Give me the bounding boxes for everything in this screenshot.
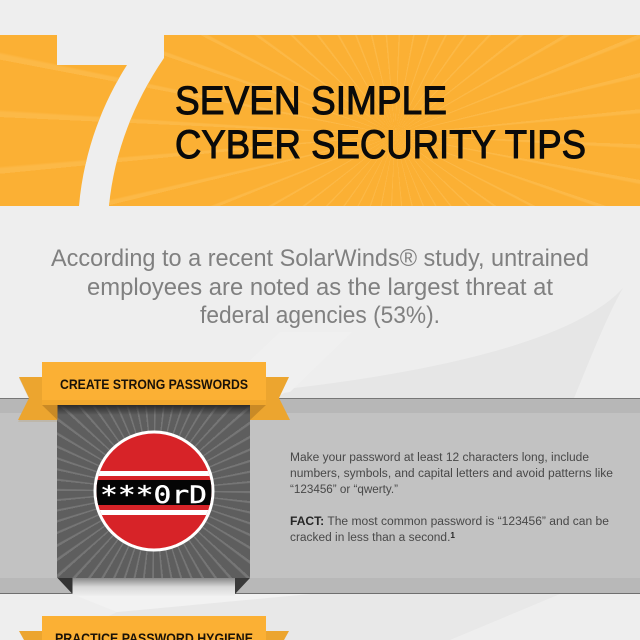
sunburst rays [0, 35, 640, 206]
ribbon: create strong passwords: CREATE STRONG PASSWORDS [60, 376, 248, 392]
tip body text: cracked in less than a second. [290, 532, 445, 544]
tip body text [290, 452, 613, 544]
header banner with cut-out numeral seven [0, 35, 640, 206]
intro text: According to a recent SolarWinds® study, untrained [51, 245, 589, 272]
tip body text: 1 [450, 531, 456, 540]
card rays [57, 405, 250, 578]
band bottom strip [0, 578, 640, 594]
tip body text: Make your password at least 12 characters long, include [290, 452, 589, 464]
card top shadow [57, 405, 250, 415]
icon: password sign [94, 430, 214, 552]
card fold corners [58, 578, 250, 594]
title [175, 79, 586, 167]
ribbon: create strong passwords [18, 362, 290, 422]
tip body text: “123456” or “qwerty.” [290, 484, 398, 496]
title: SEVEN SIMPLE [175, 79, 447, 123]
band top strip [0, 398, 640, 413]
intro text: federal agencies (53%). [200, 302, 440, 329]
title: CYBER SECURITY TIPS [175, 123, 586, 167]
icon: password sign: ***0rD [100, 481, 207, 509]
panel shadow below dark card [72, 578, 235, 596]
dark icon card [57, 405, 250, 578]
ribbon: practice password hygiene [19, 616, 289, 640]
tip body text: numbers, symbols, and capital letters and avoid patterns like [290, 468, 613, 480]
intro text: employees are noted as the largest threat at [87, 274, 553, 301]
panel: create strong passwords band [0, 398, 640, 594]
tip body text: FACT: The most common password is “123456” and can be [290, 516, 609, 528]
intro text [51, 245, 589, 329]
